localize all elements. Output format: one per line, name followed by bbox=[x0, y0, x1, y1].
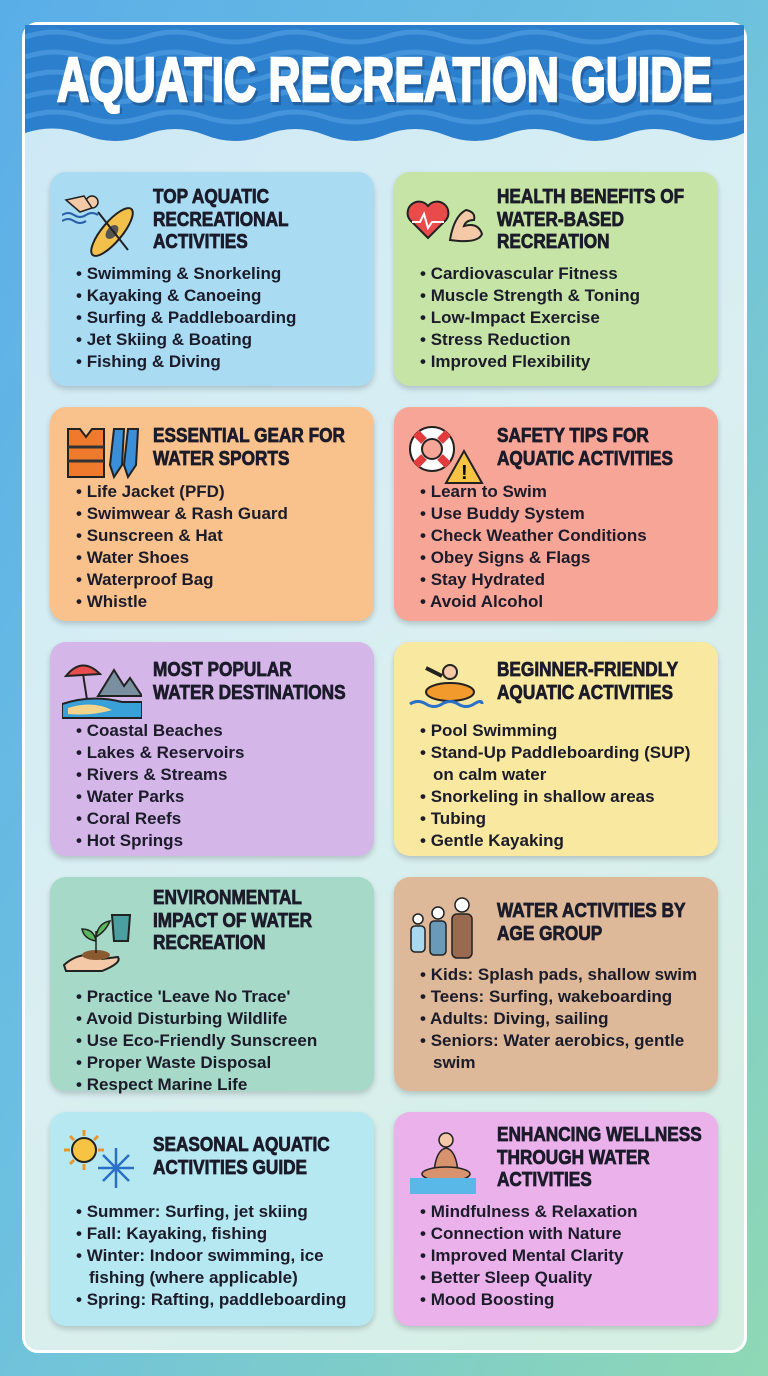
heading: ACTIVITIES bbox=[153, 230, 248, 253]
heading: ACTIVITIES bbox=[497, 1168, 592, 1191]
heading bbox=[496, 1123, 702, 1191]
list: Fishing & Diving bbox=[87, 352, 221, 371]
panel: wellness bbox=[394, 1112, 718, 1326]
list: Coral Reefs bbox=[87, 809, 181, 828]
list: Adults: Diving, sailing bbox=[430, 1009, 609, 1028]
icon: meditating person on water bbox=[410, 1132, 476, 1194]
heading: AQUATIC ACTIVITIES bbox=[497, 680, 673, 704]
list bbox=[76, 721, 245, 850]
list bbox=[76, 482, 288, 611]
list bbox=[420, 482, 647, 611]
list: Winter: Indoor swimming, ice bbox=[87, 1246, 324, 1265]
heading: ENHANCING WELLNESS bbox=[497, 1123, 702, 1146]
list: Hot Springs bbox=[87, 831, 183, 850]
heading: AQUATIC ACTIVITIES bbox=[497, 446, 673, 470]
list: Jet Skiing & Boating bbox=[87, 330, 252, 349]
list: Proper Waste Disposal bbox=[87, 1053, 271, 1072]
list: Improved Flexibility bbox=[431, 352, 590, 371]
list bbox=[420, 1202, 638, 1309]
heading bbox=[153, 1133, 330, 1178]
heading: SEASONAL AQUATIC bbox=[153, 1133, 330, 1156]
heading: ENVIRONMENTAL bbox=[153, 886, 302, 909]
list: Tubing bbox=[431, 809, 486, 828]
icon: family figures bbox=[410, 897, 473, 959]
list: Improved Mental Clarity bbox=[431, 1246, 623, 1265]
list: Teens: Surfing, wakeboarding bbox=[431, 987, 672, 1006]
icon: beach umbrella and mountains bbox=[62, 664, 142, 719]
list: Surfing & Paddleboarding bbox=[87, 308, 296, 327]
list: Stand-Up Paddleboarding (SUP) bbox=[431, 743, 690, 762]
heading: WATER-BASED bbox=[497, 208, 624, 230]
list: Rivers & Streams bbox=[87, 765, 228, 784]
heading bbox=[152, 658, 346, 704]
list: Muscle Strength & Toning bbox=[431, 286, 640, 305]
list: Low-Impact Exercise bbox=[431, 308, 600, 327]
panel: beginner-friendly bbox=[394, 642, 718, 856]
list: Swimwear & Rash Guard bbox=[87, 504, 288, 523]
icon: life ring and warning bbox=[409, 426, 484, 484]
list: Seniors: Water aerobics, gentle bbox=[431, 1031, 684, 1050]
list: Avoid Disturbing Wildlife bbox=[86, 1009, 287, 1028]
list: Obey Signs & Flags bbox=[431, 548, 590, 567]
list bbox=[76, 264, 296, 371]
panel: by age group bbox=[394, 877, 718, 1091]
list: Pool Swimming bbox=[431, 721, 557, 740]
list: Lakes & Reservoirs bbox=[87, 743, 245, 762]
heading bbox=[152, 424, 346, 470]
list bbox=[76, 987, 317, 1094]
list: Fall: Kayaking, fishing bbox=[87, 1224, 267, 1243]
list: Better Sleep Quality bbox=[431, 1268, 592, 1287]
heading bbox=[153, 886, 312, 954]
list: Respect Marine Life bbox=[87, 1075, 247, 1094]
list: Water Shoes bbox=[87, 548, 189, 567]
list: Whistle bbox=[87, 592, 147, 611]
list: Snorkeling in shallow areas bbox=[431, 787, 655, 806]
panel: top activities bbox=[50, 172, 374, 386]
list bbox=[76, 1202, 346, 1309]
list: Sunscreen & Hat bbox=[87, 526, 223, 545]
panel: safety tips bbox=[394, 407, 718, 621]
heading: IMPACT OF WATER bbox=[153, 908, 312, 932]
list: Waterproof Bag bbox=[87, 570, 214, 589]
list: Water Parks bbox=[87, 787, 184, 806]
heading: TOP AQUATIC bbox=[153, 185, 269, 208]
list: Cardiovascular Fitness bbox=[431, 264, 618, 283]
list: swim bbox=[433, 1053, 476, 1072]
list: Spring: Rafting, paddleboarding bbox=[87, 1290, 346, 1309]
list bbox=[420, 264, 640, 371]
list bbox=[420, 721, 690, 850]
list: Use Buddy System bbox=[431, 504, 585, 523]
heading: ESSENTIAL GEAR FOR bbox=[153, 424, 345, 447]
list: Learn to Swim bbox=[431, 482, 547, 501]
list: on calm water bbox=[433, 765, 546, 784]
icon: heart and muscle bbox=[406, 200, 483, 242]
list: Coastal Beaches bbox=[87, 721, 223, 740]
heading: SAFETY TIPS FOR bbox=[497, 424, 649, 447]
list: Connection with Nature bbox=[431, 1224, 621, 1243]
icon: swimmer and kayak bbox=[62, 195, 134, 257]
list: Check Weather Conditions bbox=[431, 526, 647, 545]
list: Life Jacket (PFD) bbox=[87, 482, 225, 501]
list: Kayaking & Canoeing bbox=[87, 286, 261, 305]
heading: RECREATIONAL bbox=[153, 208, 289, 230]
heading bbox=[497, 424, 673, 470]
heading: RECREATION bbox=[153, 931, 266, 954]
list: Use Eco-Friendly Sunscreen bbox=[87, 1031, 317, 1050]
heading: MOST POPULAR bbox=[153, 658, 292, 681]
list: Practice 'Leave No Trace' bbox=[87, 987, 290, 1006]
list: Kids: Splash pads, shallow swim bbox=[431, 965, 697, 984]
list: Avoid Alcohol bbox=[430, 592, 543, 611]
list: Summer: Surfing, jet skiing bbox=[87, 1202, 308, 1221]
icon: hand with plant and bin bbox=[62, 914, 132, 972]
heading: WATER SPORTS bbox=[153, 446, 290, 470]
icon: swimmer with tube bbox=[409, 664, 484, 708]
panel: environmental impact bbox=[50, 877, 374, 1091]
heading bbox=[496, 185, 684, 253]
header wave banner bbox=[25, 25, 744, 141]
list: Mindfulness & Relaxation bbox=[431, 1202, 638, 1221]
list: fishing (where applicable) bbox=[89, 1268, 298, 1287]
list: Stay Hydrated bbox=[431, 570, 545, 589]
icon: life ring and warning: ! bbox=[461, 462, 468, 484]
heading: THROUGH WATER bbox=[497, 1146, 650, 1168]
panel: seasonal bbox=[50, 1112, 374, 1326]
heading: RECREATION bbox=[497, 230, 610, 253]
list bbox=[420, 965, 697, 1072]
heading: ACTIVITIES GUIDE bbox=[153, 1156, 307, 1178]
list: Mood Boosting bbox=[431, 1290, 554, 1309]
icon: sun and snowflake bbox=[64, 1130, 134, 1188]
panel: essential gear bbox=[50, 407, 374, 621]
heading bbox=[497, 658, 678, 704]
heading bbox=[496, 899, 686, 944]
panel: destinations bbox=[50, 642, 374, 856]
heading bbox=[152, 185, 289, 253]
panel: health benefits bbox=[394, 172, 718, 386]
list: Gentle Kayaking bbox=[431, 831, 564, 850]
heading: HEALTH BENEFITS OF bbox=[497, 185, 684, 208]
heading: BEGINNER-FRIENDLY bbox=[497, 658, 678, 681]
heading: WATER DESTINATIONS bbox=[153, 680, 346, 704]
list: Stress Reduction bbox=[431, 330, 570, 349]
heading: WATER ACTIVITIES BY bbox=[497, 899, 685, 922]
icon: life jacket and fins bbox=[67, 428, 140, 480]
list: Swimming & Snorkeling bbox=[87, 264, 281, 283]
heading: AGE GROUP bbox=[497, 922, 602, 944]
